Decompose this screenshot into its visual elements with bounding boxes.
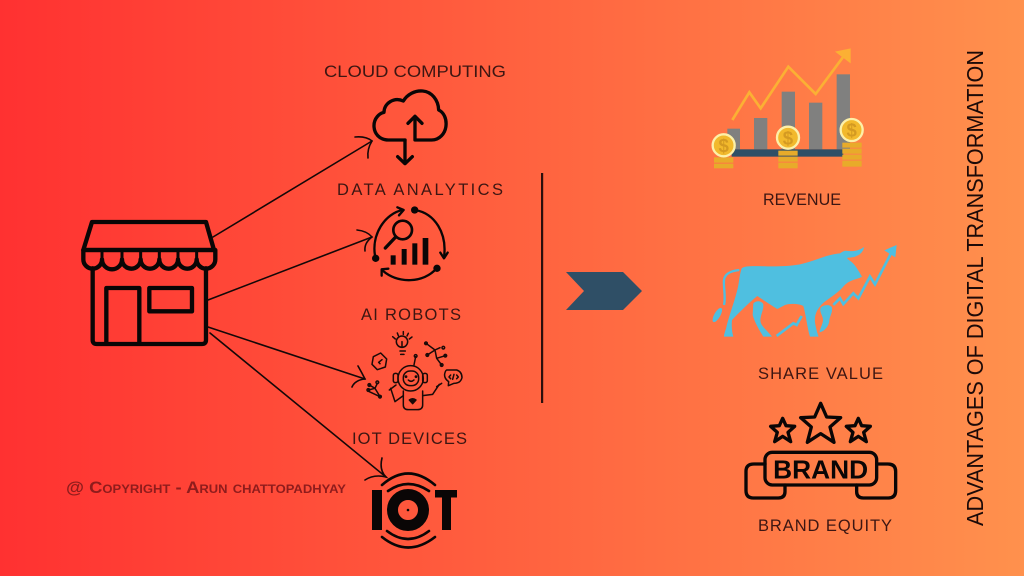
label: share value: SHARE VALUE	[758, 365, 883, 383]
vertical title: ADVANTAGES OF DIGITAL TRANSFORMATION	[962, 50, 988, 526]
icon: brand badge: BRAND	[773, 454, 868, 484]
arrow: store to data analytics	[208, 230, 372, 300]
icon: brand badge	[746, 403, 896, 498]
label: data analytics: DATA ANALYTICS	[337, 181, 503, 199]
icon: store	[83, 222, 215, 344]
label: brand equity: BRAND EQUITY	[758, 517, 892, 535]
label: revenue: REVENUE	[763, 191, 841, 209]
arrow: store to IoT devices	[210, 333, 386, 480]
arrow: store to AI robots	[208, 327, 365, 387]
icon: cloud computing	[374, 91, 446, 164]
icon: revenue chart: $	[846, 120, 857, 141]
arrow: chevron	[566, 272, 642, 310]
label: cloud computing: CLOUD COMPUTING	[324, 63, 506, 81]
icon: revenue chart: $	[718, 135, 729, 156]
icon: bull with rising chart	[711, 245, 897, 337]
icon: revenue chart	[713, 48, 863, 168]
label: AI robots: AI ROBOTS	[361, 306, 461, 324]
divider	[541, 173, 543, 403]
copyright notice: @ Copyright - Arun chattopadhyay	[66, 478, 346, 497]
icon: data analytics	[372, 206, 448, 280]
icon: IoT	[372, 474, 457, 548]
label: IoT devices: IOT DEVICES	[352, 430, 467, 448]
arrow: store to cloud computing	[213, 137, 372, 237]
icon: AI robot	[367, 332, 462, 410]
icon: revenue chart: $	[783, 127, 794, 148]
